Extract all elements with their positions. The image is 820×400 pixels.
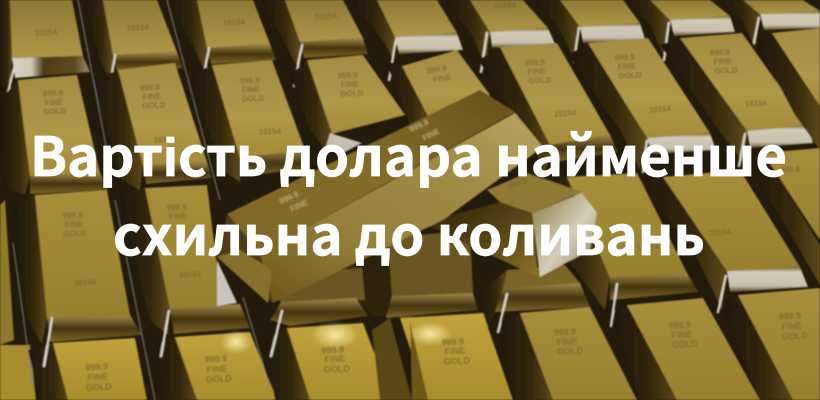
row of gold bars: front: FINE — [556, 336, 577, 348]
row of gold bars: second: GOLD — [714, 65, 738, 76]
row of gold bars: second — [0, 28, 820, 195]
row of gold bars: front: FINE — [87, 371, 108, 383]
row of gold bars: second: 999.9 — [615, 52, 636, 63]
row of gold bars: front — [0, 288, 820, 400]
centre gold bar: upper, tilted: 999.9 — [278, 189, 300, 206]
row of gold bars: front: GOLD — [86, 381, 113, 393]
row of gold bars: second: 10154 — [554, 108, 577, 119]
row of gold bars: second: FINE — [432, 73, 452, 84]
row of gold bars: front: FINE — [444, 345, 465, 357]
row of gold bars: third — [0, 148, 820, 345]
row of gold bars: back: 10154 — [35, 27, 58, 38]
row of gold bars: front: 999.9 — [668, 319, 691, 331]
row of gold bars: second: FINE — [143, 91, 162, 101]
row of gold bars: third: GOLD — [63, 228, 87, 239]
row of gold bars: third: 999.9 — [167, 202, 188, 213]
row of gold bars: second: FINE — [45, 97, 64, 107]
row of gold bars: second: 10154 — [259, 126, 282, 137]
row of gold bars: third: 999.9 — [63, 210, 84, 221]
row of gold bars: front: GOLD — [672, 338, 699, 350]
row of gold bars: second: 999.9 — [240, 75, 261, 86]
row of gold bars: front: FINE — [781, 320, 802, 332]
centre gold bar: lower, crossing: 999.9 — [506, 176, 529, 191]
row of gold bars: second: 10154 — [745, 98, 768, 109]
row of gold bars: third: 10154 — [74, 277, 97, 288]
row of gold bars: front: GOLD — [782, 330, 809, 342]
row of gold bars: second: 999.9 — [43, 88, 64, 99]
centre gold bar: upper, tilted: FINE — [289, 198, 310, 214]
centre gold bar: upper, tilted: 999.9 — [408, 117, 430, 134]
row of gold bars: third: FINE — [169, 211, 188, 221]
row of gold bars: second: FINE — [528, 66, 547, 76]
row of gold bars: front: FINE — [206, 363, 227, 375]
row of gold bars: back: 10154 — [127, 22, 150, 33]
row of gold bars: second: 10154 — [649, 104, 672, 115]
row of gold bars: second: GOLD — [528, 75, 552, 86]
row of gold bars: second: FINE — [618, 61, 637, 71]
row of gold bars: second: FINE — [714, 56, 733, 66]
centre gold bar: upper, tilted: FINE — [421, 127, 442, 143]
row of gold bars: back: 10154 — [494, 0, 517, 11]
bevel glints: front rows — [44, 134, 745, 366]
row of gold bars: second: GOLD — [340, 88, 364, 99]
row of gold bars: back: 10154 — [315, 11, 338, 22]
row of gold bars: front: 999.9 — [321, 344, 344, 356]
row of gold bars: third: 10154 — [709, 227, 732, 238]
row of gold bars: front: GOLD — [324, 363, 351, 375]
thin pale edge reflections between bars — [13, 0, 270, 400]
row of gold bars: third: 10154 — [637, 242, 660, 253]
row of gold bars: second: 10154 — [154, 134, 177, 145]
row of gold bars: second: 999.9 — [140, 82, 161, 93]
title — [30, 113, 787, 271]
row of gold bars: second: 999.9 — [426, 64, 448, 75]
title line 2: схильна до коливань — [113, 192, 705, 271]
row of gold bars: second: GOLD — [43, 106, 67, 117]
row of gold bars: front: 999.9 — [85, 361, 108, 373]
row of gold bars: third: 999.9 — [780, 164, 801, 175]
row of gold bars: front: GOLD — [444, 355, 471, 367]
row of gold bars: front: FINE — [324, 353, 345, 365]
row of gold bars: second: GOLD — [241, 93, 265, 104]
row of gold bars: front: FINE — [671, 329, 692, 341]
centre gold bar: lower, crossing — [423, 173, 597, 277]
row of gold bars: front: 999.9 — [553, 326, 576, 338]
row of gold bars: second: 999.9 — [338, 70, 359, 81]
row of gold bars: front: 999.9 — [778, 310, 801, 322]
row of gold bars: front: 999.9 — [441, 336, 464, 348]
row of gold bars: third: FINE — [65, 219, 84, 229]
row of gold bars: second: GOLD — [618, 70, 642, 81]
row of gold bars: second: FINE — [341, 79, 360, 89]
row of gold bars: front: GOLD — [557, 345, 584, 357]
centre gold bar: upper, tilted — [217, 90, 543, 303]
bevel glints: back row — [8, 18, 759, 92]
row of gold bars: second: FINE — [242, 84, 261, 94]
row of gold bars: second: 999.9 — [525, 57, 546, 68]
row of gold bars: front: GOLD — [206, 373, 233, 385]
row of gold bars: second: 999.9 — [710, 47, 731, 58]
title line 1: Вартість долара найменше — [30, 113, 787, 192]
row of gold bars: front: 999.9 — [204, 353, 227, 365]
row of gold bars: third: 10154 — [179, 269, 202, 280]
row of gold bars: back: 10154 — [223, 17, 246, 28]
row of gold bars: back — [0, 0, 820, 92]
row of gold bars: second: GOLD — [142, 100, 166, 111]
